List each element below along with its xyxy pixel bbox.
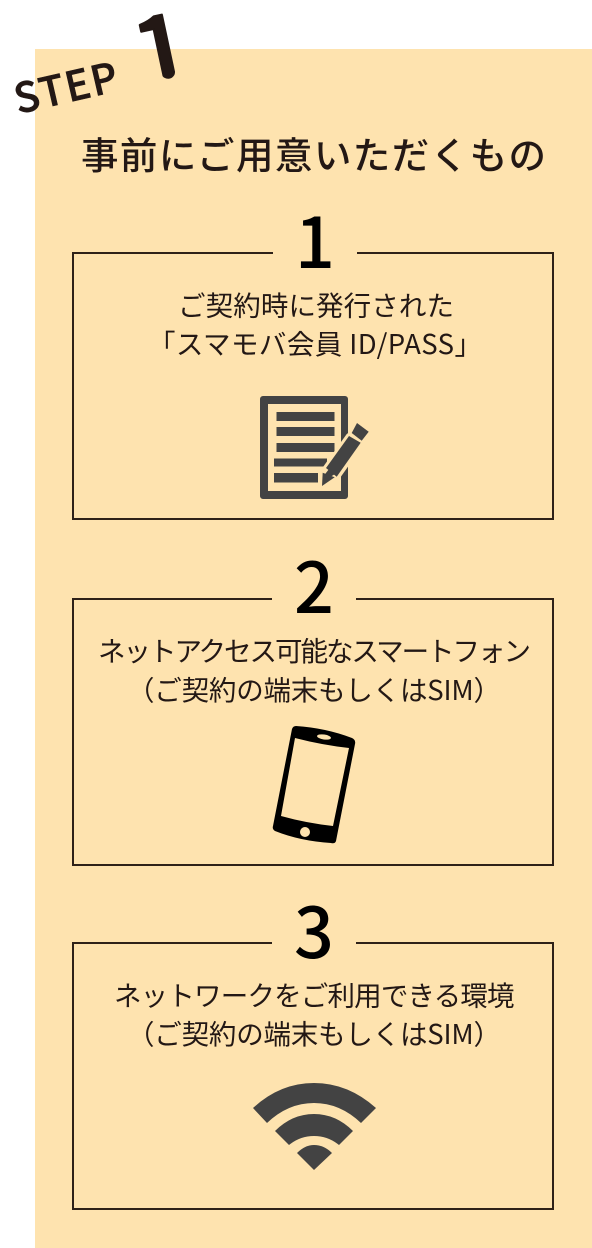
- item 3 frame: [73, 943, 553, 1209]
- icon: wifi: [253, 1083, 376, 1170]
- item 1 text: 「スマモバ会員 ID/PASS」: [148, 322, 482, 362]
- item 1 frame: [73, 253, 553, 519]
- item 2 frame: [73, 599, 553, 865]
- item 3 text: ネットワークをご利用できる環境: [114, 974, 514, 1014]
- item 1 text: [148, 284, 482, 362]
- title: 事前にご用意いただくもの: [81, 125, 546, 180]
- item 2 text: ネットアクセス可能なスマートフォン: [98, 629, 531, 669]
- icon: smartphone: [273, 726, 355, 843]
- item 3 text: [114, 974, 514, 1052]
- icon: document and pencil: [260, 396, 369, 499]
- item 2 text: [98, 629, 531, 708]
- step label: STEP: [7, 44, 123, 126]
- panel: item 2: [73, 533, 553, 865]
- item 2 text: （ご契約の端末もしくはSIM）: [127, 668, 501, 708]
- panel: item 3: [73, 878, 553, 1209]
- item 3 number: 3: [294, 878, 334, 979]
- item 1 text: ご契約時に発行された: [178, 284, 454, 324]
- step label: [16, 14, 175, 112]
- item 2 number: 2: [294, 533, 334, 634]
- panel: item 1: [73, 188, 553, 519]
- item 1 number: 1: [295, 188, 335, 289]
- item 3 text: （ご契約の端末もしくはSIM）: [127, 1012, 501, 1052]
